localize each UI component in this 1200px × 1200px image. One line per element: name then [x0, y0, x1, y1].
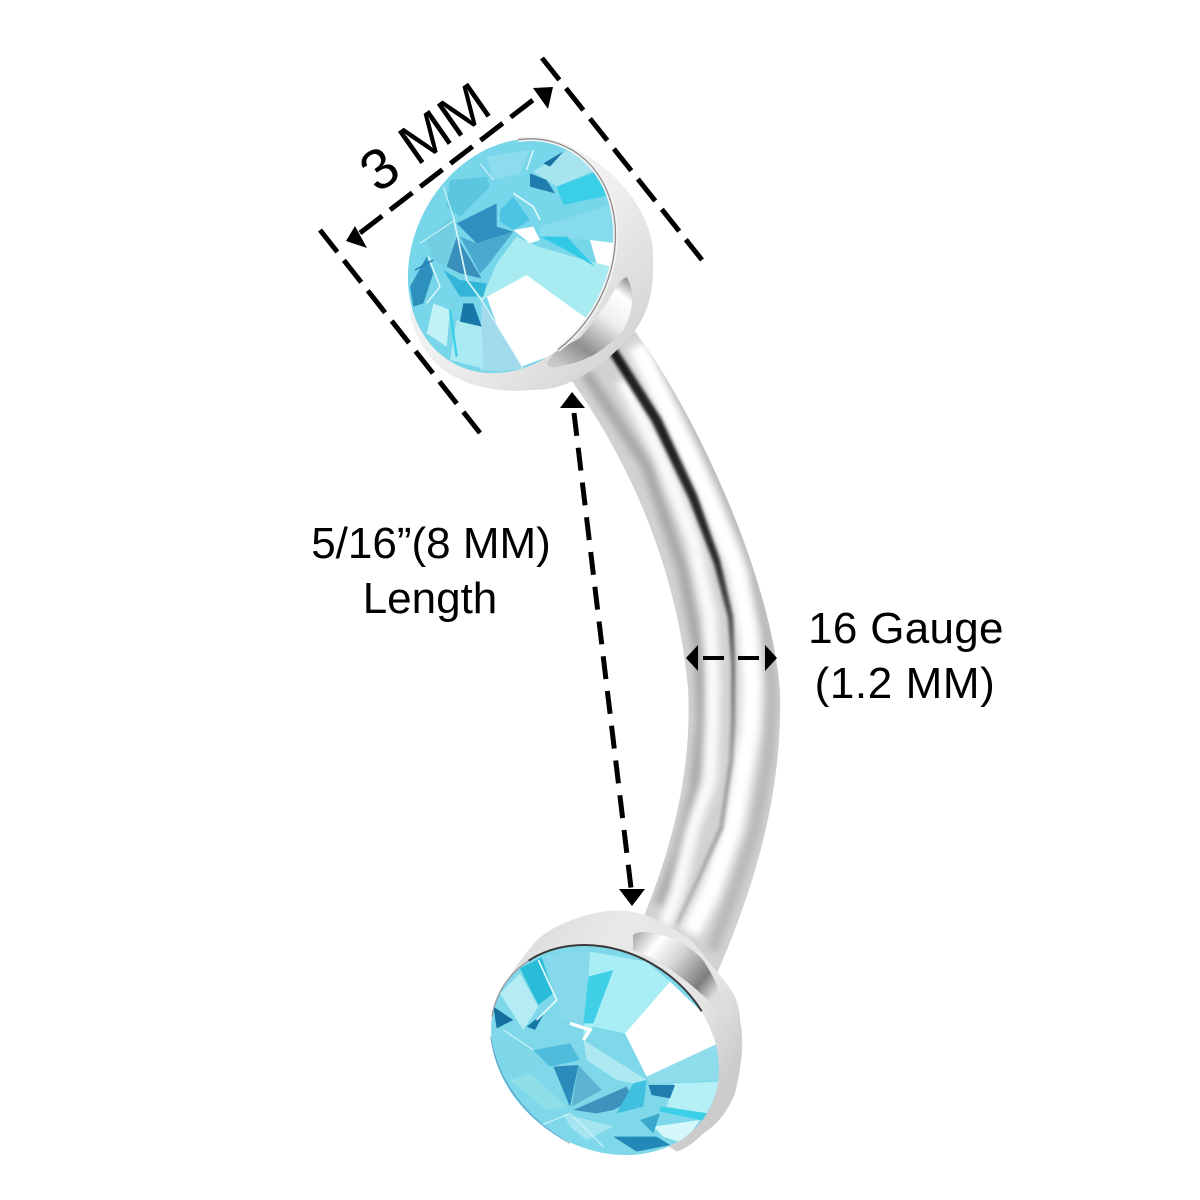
top gem setting and crystal — [383, 133, 653, 391]
label: length: Length — [363, 574, 497, 623]
label: length — [311, 519, 551, 623]
metal cup, bottom — [491, 910, 742, 1152]
arrowhead, down — [619, 889, 645, 906]
label: gauge — [808, 604, 1004, 708]
cup glossy lip — [633, 932, 721, 1010]
arrowhead, left — [346, 226, 367, 248]
curved barbell shank — [560, 318, 780, 985]
label: gauge: 16 Gauge — [808, 604, 1004, 653]
crystal facets, top — [408, 140, 614, 374]
dashed guide, left — [320, 230, 480, 433]
dimension: gauge double arrow — [686, 645, 777, 671]
gem rim — [518, 139, 615, 350]
arrowhead, up — [560, 392, 585, 408]
dashed guide, right — [542, 58, 702, 260]
label: 3 MM: 3 MM — [348, 70, 502, 205]
arrowhead, right — [765, 645, 777, 671]
label: length: 5/16”(8 MM) — [311, 519, 551, 568]
dimension: 3 MM width — [320, 58, 702, 433]
gem rim — [492, 961, 529, 1017]
crystal facets, bottom — [491, 946, 719, 1155]
cup glossy base highlight — [547, 277, 632, 367]
arrowhead, left — [686, 645, 698, 671]
arrowhead, right — [533, 87, 553, 109]
label: gauge: (1.2 MM) — [815, 659, 995, 708]
dimension: length dashed arrow — [560, 392, 645, 906]
metal cup, top — [410, 140, 653, 391]
bottom gem setting and crystal — [477, 910, 742, 1167]
double arrow line — [360, 100, 533, 233]
